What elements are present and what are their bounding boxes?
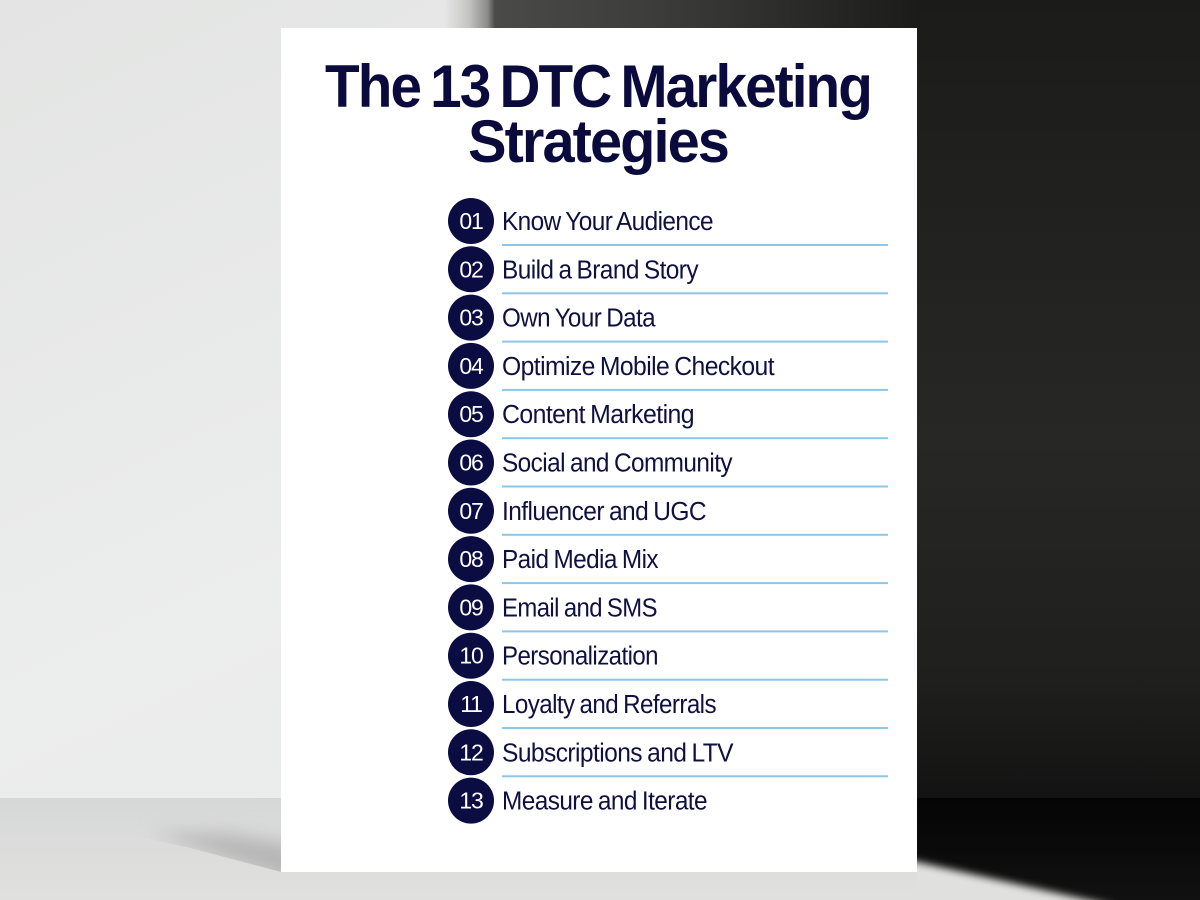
item 09: Email and SMS: [502, 594, 657, 622]
panel: white poster: [281, 28, 917, 872]
card shadow on floor: [166, 826, 281, 872]
item 13: Measure and Iterate: [502, 788, 707, 816]
item 11: 11: [460, 691, 482, 717]
item 02: 02: [459, 256, 483, 282]
item 01: 01: [459, 208, 483, 234]
list: strategies: [448, 198, 888, 824]
item 07: 07: [459, 498, 483, 524]
item 13: 13: [459, 788, 483, 814]
item 13: [448, 778, 707, 824]
background: lit floor wedge: [900, 858, 1115, 900]
item 08: [448, 536, 888, 584]
item 07: Influencer and UGC: [502, 498, 706, 526]
item 04: [448, 343, 888, 391]
title: Strategies: [468, 108, 728, 175]
item 06: 06: [459, 450, 483, 476]
item 07: [448, 488, 888, 536]
item 04: Optimize Mobile Checkout: [502, 353, 774, 381]
background: floor: [0, 798, 1200, 900]
item 04: 04: [459, 353, 484, 379]
item 01: Know Your Audience: [502, 208, 713, 236]
item 05: [448, 391, 888, 439]
item 08: Paid Media Mix: [502, 546, 659, 574]
item 02: Build a Brand Story: [502, 256, 699, 284]
item 09: [448, 584, 888, 632]
background: dark wall: [520, 0, 1200, 798]
item 11: [448, 681, 888, 729]
item 01: [448, 198, 888, 246]
item 02: [448, 246, 888, 294]
item 06: [448, 440, 888, 488]
item 10: Personalization: [502, 643, 658, 671]
item 05: Content Marketing: [502, 401, 694, 429]
background: top wall shadow edge: [445, 0, 920, 28]
item 03: Own Your Data: [502, 305, 656, 333]
item 03: [448, 295, 888, 343]
title: [325, 53, 871, 175]
item 11: Loyalty and Referrals: [502, 691, 716, 719]
item 12: 12: [459, 739, 483, 765]
title: The 13 DTC Marketing: [325, 53, 871, 120]
item 10: 10: [459, 643, 483, 669]
item 12: [448, 729, 888, 777]
item 03: 03: [459, 305, 483, 331]
item 09: 09: [459, 594, 483, 620]
item 05: 05: [459, 401, 483, 427]
item 08: 08: [459, 546, 483, 572]
background: dark floor: [917, 798, 1200, 900]
item 06: Social and Community: [502, 450, 733, 478]
item 10: [448, 633, 888, 681]
item 12: Subscriptions and LTV: [502, 739, 734, 767]
